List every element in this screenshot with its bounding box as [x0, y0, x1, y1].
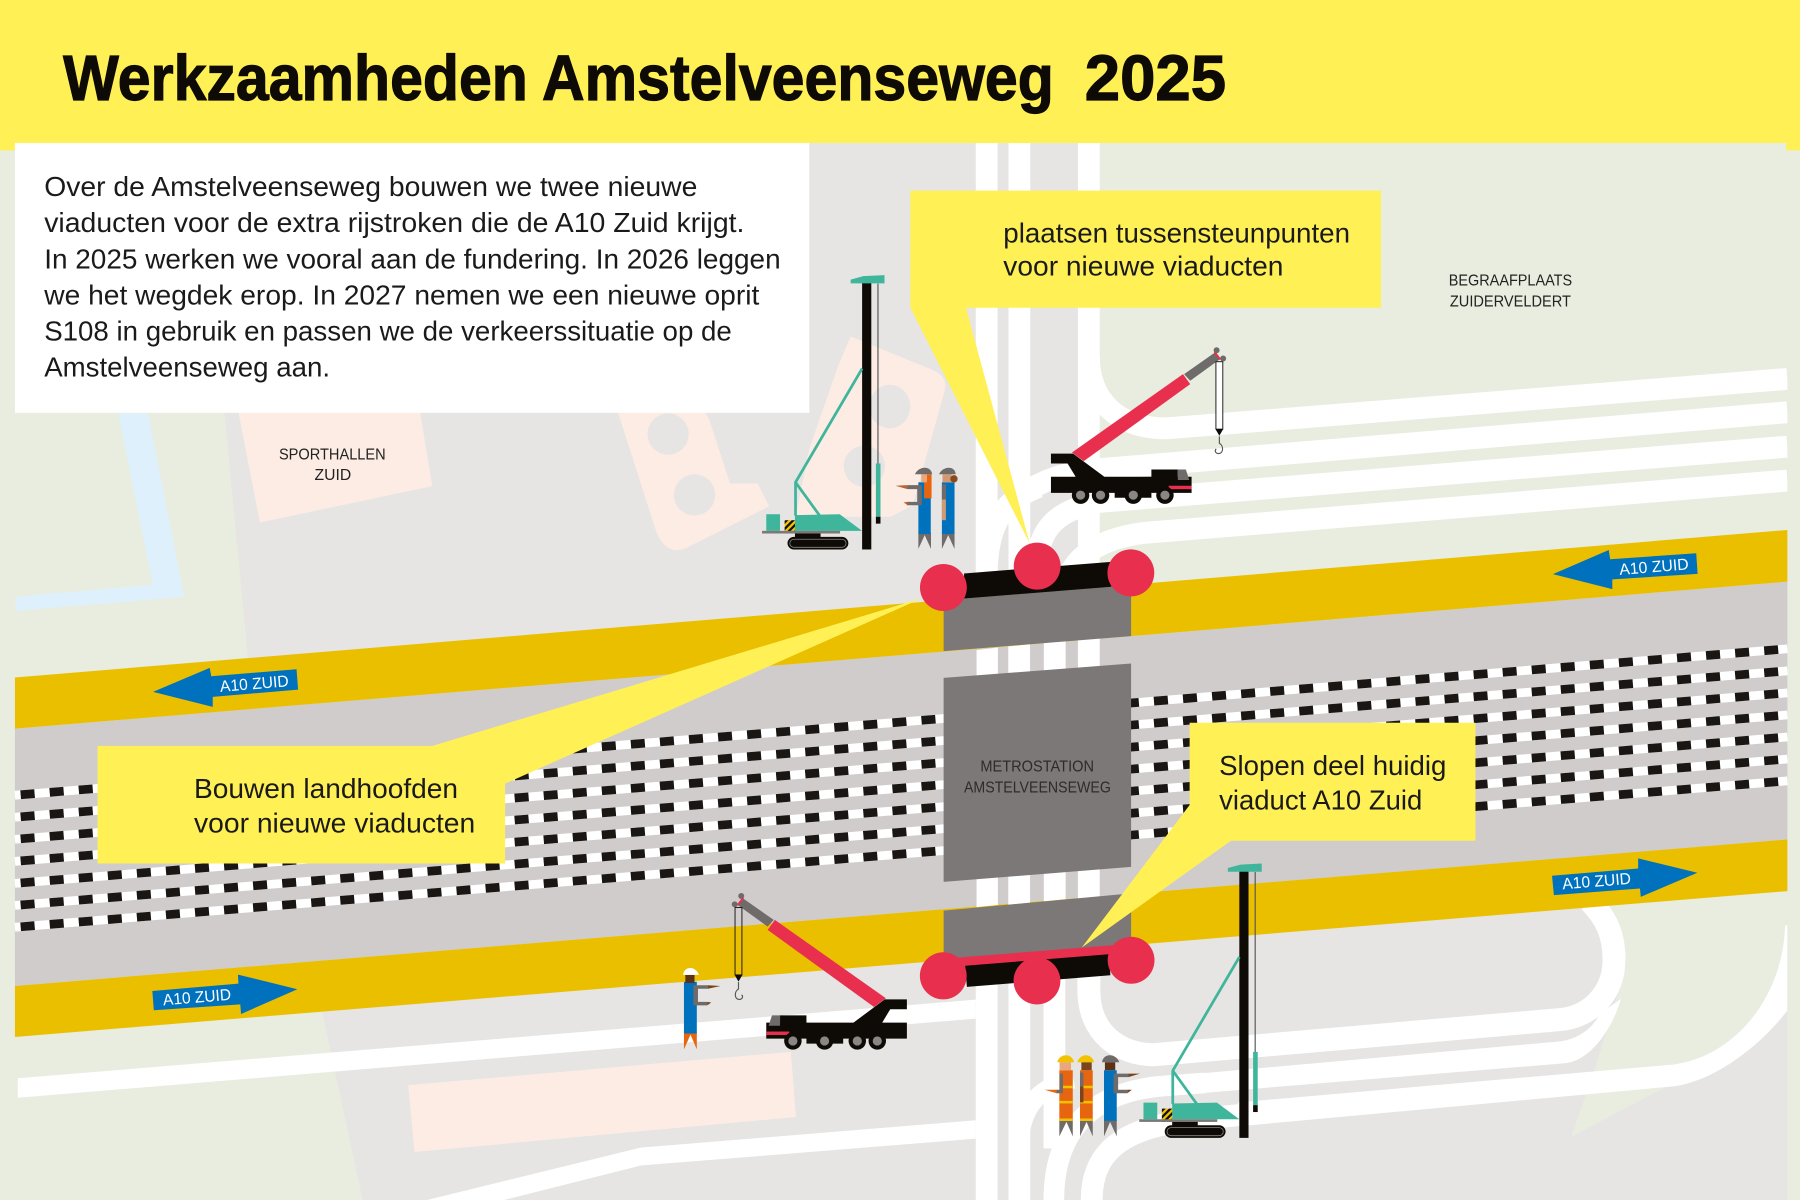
callout: slopen deel huidig viaduct: viaduct A10 Zuid: [1219, 785, 1422, 816]
icon: pile driving rig north: [762, 275, 885, 549]
road strips under viaducts: [977, 637, 1100, 907]
intro text: In 2025 werken we vooral aan de fundering. In 2026 leggen: [44, 243, 781, 274]
intro text: Amstelveenseweg aan.: [44, 351, 330, 382]
header band: [0, 0, 1800, 150]
label: begraafplaats zuiderveldert: BEGRAAFPLAATS: [1449, 272, 1572, 290]
green land lower right: [1571, 884, 1787, 1137]
railway tracks: [15, 649, 1787, 927]
red support points north: [920, 543, 1154, 611]
label: sporthallen zuid: SPORTHALLEN: [279, 445, 386, 463]
building: pink block left: [616, 408, 769, 550]
carriageway south: [15, 839, 1787, 1037]
demolition bar: [957, 945, 1114, 966]
white road lower left: [18, 1000, 976, 1098]
callout: plaatsen tussensteunpunten: [910, 191, 1381, 544]
intro text panel: [15, 143, 809, 413]
callout: bouwen landhoofden: Bouwen landhoofden: [194, 773, 458, 804]
label: metrostation: METROSTATION: [980, 759, 1094, 776]
callout: slopen deel huidig viaduct: [1082, 723, 1475, 948]
callout: bouwen landhoofden: voor nieuwe viaducten: [194, 808, 475, 839]
carriageway north: [15, 530, 1787, 729]
water stripe: [16, 413, 184, 611]
icon: crane north: [1051, 347, 1226, 504]
label: begraafplaats zuiderveldert: ZUIDERVELDERT: [1450, 293, 1571, 311]
grey urban land: [199, 142, 1787, 1200]
building holes: [647, 385, 910, 516]
icon: workers lower right: [1045, 1055, 1140, 1136]
motorway median grey: [15, 582, 1787, 986]
arrow: A10 Zuid north west: A10 ZUID: [219, 672, 289, 696]
abutment bar north: [964, 562, 1111, 599]
callout: plaatsen tussensteunpunten: plaatsen tussensteunpunten: [1003, 217, 1350, 248]
arrow: A10 Zuid north east: A10 ZUID: [1619, 555, 1689, 579]
worker orange one: [1045, 1055, 1074, 1136]
title: 2025: [1085, 42, 1226, 114]
white road lower right bend: [1238, 926, 1787, 1125]
icon: workers north: [895, 468, 958, 549]
icon: crane south: [732, 893, 907, 1050]
label: metrostation: AMSTELVEENSEWEG: [964, 779, 1111, 796]
building: pink block right: [796, 336, 945, 517]
icon: pile driving rig south: [1139, 864, 1262, 1138]
red support points south: [920, 937, 1155, 1004]
arrow: A10 Zuid south east: [1552, 858, 1697, 897]
icon: worker lower left: [683, 968, 720, 1049]
arrow: A10 Zuid north east: [1553, 550, 1698, 589]
abutment bar south: [965, 954, 1110, 987]
worker orange two: [1077, 1055, 1094, 1136]
building: sporthallen: [238, 413, 432, 522]
intro text: viaducten voor de extra rijstroken die de A10 Zuid krijgt.: [44, 207, 744, 238]
south viaduct: [920, 893, 1155, 1004]
viaduct deck south: [944, 893, 1131, 974]
worker blue: [1102, 1055, 1140, 1136]
arrow: A10 Zuid south west: A10 ZUID: [162, 986, 232, 1009]
arrow: A10 Zuid south east: A10 ZUID: [1562, 870, 1632, 893]
callout: bouwen landhoofden: [98, 598, 922, 864]
metro station block with label: [944, 664, 1131, 882]
north viaduct: [920, 543, 1154, 651]
intro text: we het wegdek erop. In 2027 nemen we een nieuwe oprit: [43, 279, 760, 310]
arrow: A10 Zuid north west: [153, 668, 298, 707]
white road south: [427, 1120, 976, 1200]
white road lower right branch: [1200, 999, 1621, 1093]
intro text: Over de Amstelveenseweg bouwen we twee nieuwe: [44, 171, 697, 202]
label: sporthallen zuid: ZUID: [315, 466, 351, 484]
A10 motorway: [15, 530, 1787, 1037]
callout: plaatsen tussensteunpunten: voor nieuwe viaducten: [1003, 251, 1283, 282]
white local roads: [987, 142, 1787, 1200]
arrow: A10 Zuid south west: [152, 975, 297, 1014]
intro text: S108 in gebruik en passen we de verkeerssituatie op de: [44, 315, 732, 346]
callout: slopen deel huidig viaduct: Slopen deel huidig: [1219, 750, 1446, 781]
title: Werkzaamheden Amstelveenseweg: [63, 42, 1054, 114]
building: pink block south: [408, 1052, 796, 1152]
viaduct deck north: [944, 574, 1131, 651]
